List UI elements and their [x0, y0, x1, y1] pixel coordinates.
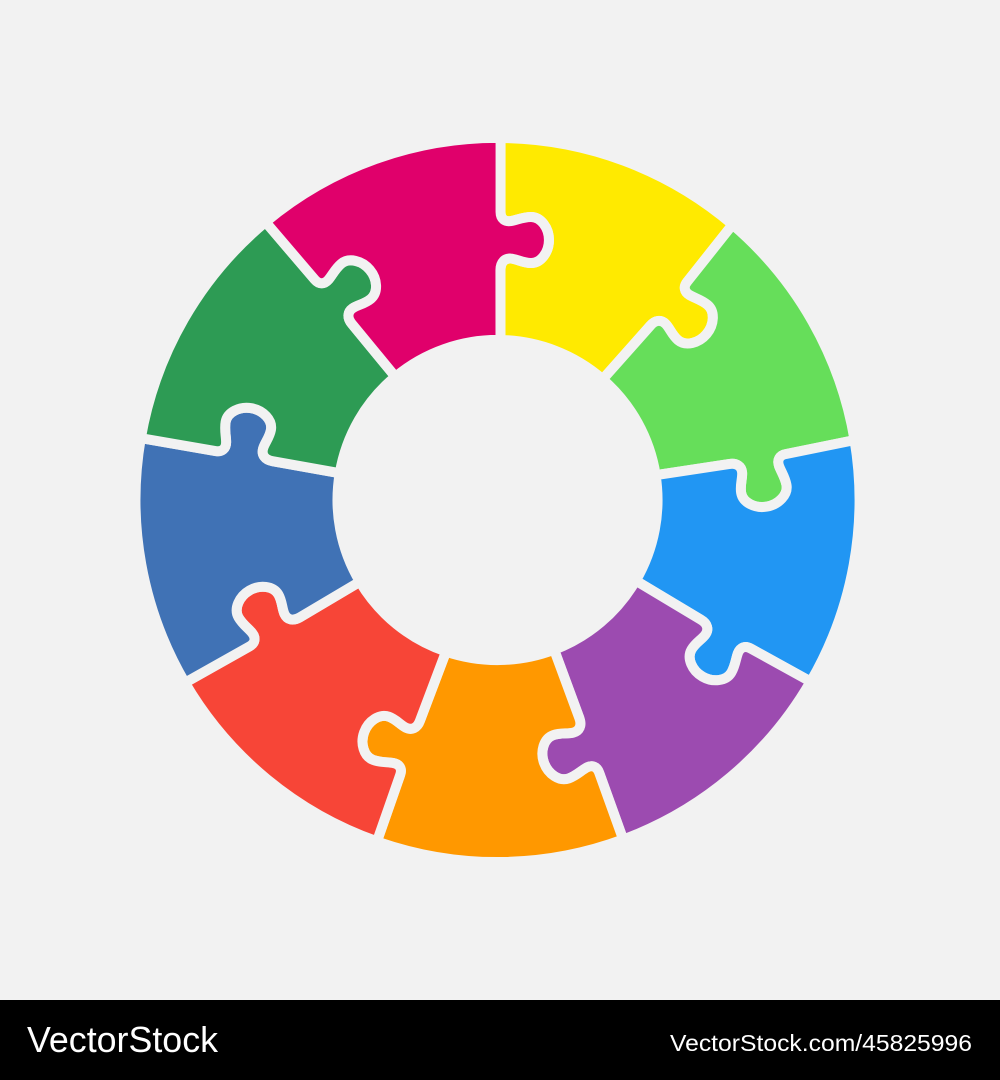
puzzle piece: dark green [141, 207, 418, 480]
puzzle piece: magenta [266, 72, 600, 407]
puzzle piece: purple [489, 563, 811, 881]
puzzle piece: light green [577, 225, 910, 559]
footer bar [0, 1000, 1000, 1080]
footer image id text: VectorStock.com/45825996 [670, 1030, 972, 1056]
puzzle piece: blue [618, 440, 895, 709]
puzzle piece: steel blue [68, 361, 392, 683]
puzzle piece: red [156, 537, 458, 841]
puzzle piece: yellow [500, 138, 733, 379]
footer logo text: VectorStock [27, 1019, 219, 1060]
puzzle ring chart [68, 72, 910, 919]
puzzle piece: orange [324, 617, 623, 919]
